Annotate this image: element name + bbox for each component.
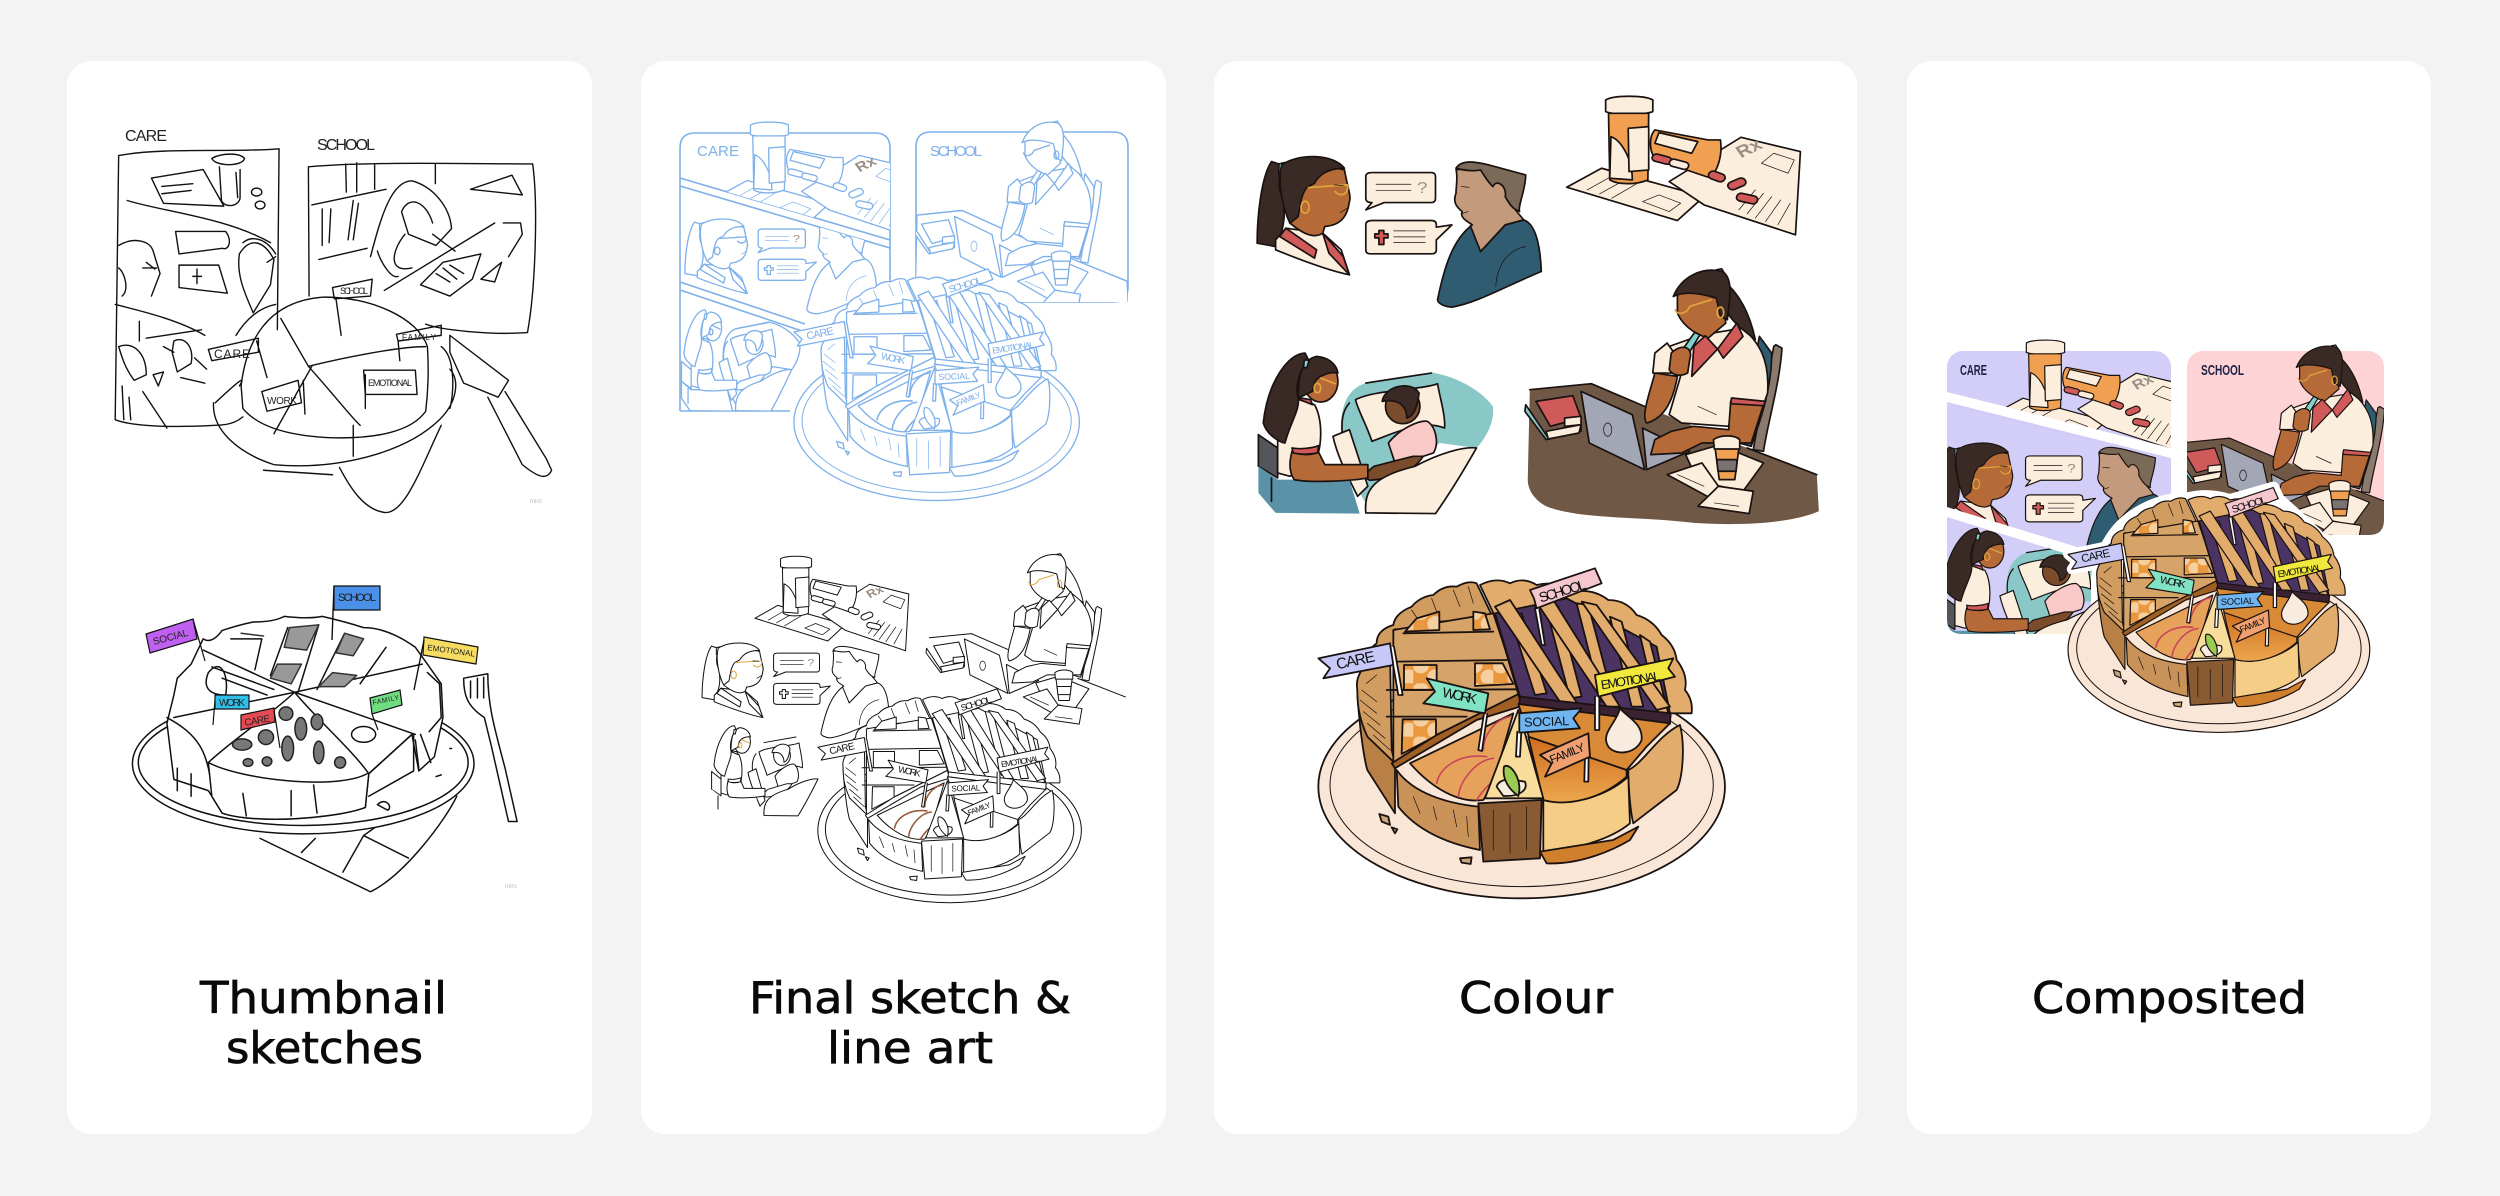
composite: conversation scene — [1947, 442, 2158, 546]
watermark: miro: miro — [505, 884, 517, 890]
line art flag labels — [828, 694, 1041, 818]
heading: colour: Colour — [1459, 973, 1614, 1024]
composite: pie with halo and flags — [2068, 488, 2370, 732]
composite: medicine scene — [2006, 340, 2171, 448]
illustration: medicine and prescription — [1567, 96, 1800, 235]
blue flag labels — [805, 275, 1035, 408]
handwritten flag labels: WORK — [267, 396, 297, 407]
flag labels on pie: FAMILY — [372, 694, 400, 707]
panel: final sketch and line art — [641, 61, 1166, 1134]
composite label: care: CARE — [1960, 362, 1987, 379]
blue label: care: CARE — [697, 143, 739, 160]
panel: colour — [1214, 61, 1857, 1134]
handwritten flag labels: EMOTIONAL — [368, 378, 412, 388]
line art flag labels: SOCIAL — [951, 783, 981, 793]
line art flag labels: WORK — [897, 764, 922, 779]
flag labels on pie: EMOTIONAL — [427, 643, 476, 659]
line art composition — [702, 554, 1127, 903]
colour flag labels: SOCIAL — [1524, 714, 1569, 730]
composite flag labels: CARE — [2080, 548, 2112, 565]
heading: final sketch and line art: line art — [827, 1023, 993, 1074]
heading: composited: Composited — [2032, 973, 2307, 1024]
composite flag labels — [2080, 495, 2323, 635]
line art flag labels: EMOTIONAL — [1000, 754, 1041, 769]
colour flag labels: CARE — [1335, 648, 1377, 673]
handwritten flag labels: SCHOOL — [340, 286, 368, 296]
blue flag labels: SCHOOL — [948, 275, 984, 296]
blue sketch composition — [680, 121, 1128, 501]
flag labels on pie: WORK — [219, 698, 245, 709]
flag labels on pie: SOCIAL — [152, 628, 190, 648]
composite flag labels: WORK — [2159, 575, 2187, 591]
composite: school panel background — [2187, 351, 2384, 535]
thumbnail: layout sketch with care and school scenes — [115, 149, 552, 513]
flag: family — [370, 690, 402, 730]
heading: thumbnail sketches — [199, 973, 447, 1074]
panel: composited — [1907, 61, 2431, 1134]
flag: work — [213, 695, 249, 725]
handwritten flag labels — [214, 286, 437, 407]
blue flag labels: WORK — [880, 351, 907, 367]
panel: thumbnail sketches — [67, 61, 592, 1134]
composite flag labels: SOCIAL — [2221, 595, 2254, 607]
heading: thumbnail sketches: sketches — [226, 1023, 423, 1074]
composite: bedside scene — [1947, 528, 2092, 634]
line art flag labels: SCHOOL — [960, 694, 992, 713]
illustration: conversation with nurse — [1257, 157, 1541, 307]
composite: desk scene — [2187, 344, 2384, 535]
composite flag labels: EMOTIONAL — [2277, 562, 2323, 579]
illustration: student at desk — [1525, 269, 1819, 524]
colour flag labels: SCHOOL — [1537, 576, 1588, 606]
handwritten flag labels: FAMILY — [402, 333, 437, 342]
line art flag labels: CARE — [828, 741, 856, 757]
blue flag labels: FAMILY — [955, 389, 983, 408]
watermark: miro: miro — [530, 499, 542, 505]
flag: social — [146, 619, 205, 661]
blue flag labels: CARE — [805, 325, 835, 343]
blue label: school: SCHOOL — [930, 143, 982, 160]
white diagonal gutters — [1947, 392, 2171, 458]
blue flag labels: EMOTIONAL — [992, 339, 1035, 356]
composite label: school: SCHOOL — [2201, 362, 2244, 379]
handwritten flag labels: CARE — [214, 347, 250, 361]
line art flag labels: FAMILY — [966, 800, 993, 818]
composite flag labels: SCHOOL — [2231, 495, 2268, 516]
thumbnail: pie with coloured flags — [132, 586, 517, 892]
flag: school — [332, 586, 380, 640]
handwritten label: care: CARE — [125, 128, 167, 145]
colour flag labels: FAMILY — [1548, 740, 1587, 767]
handwritten label: school: SCHOOL — [317, 137, 375, 154]
flag: emotional — [414, 637, 478, 690]
flag labels on pie: SCHOOL — [338, 592, 376, 604]
colour flag labels: WORK — [1441, 684, 1479, 707]
blue flag labels: SOCIAL — [938, 371, 970, 382]
heading: final sketch and line art — [749, 973, 1071, 1074]
flag labels on pie: CARE — [244, 714, 271, 729]
composite flag labels: FAMILY — [2238, 615, 2267, 635]
heading: final sketch and line art: Final sketch & — [749, 973, 1071, 1024]
flag: care — [241, 708, 280, 748]
illustration: coloured pie — [1318, 568, 1725, 898]
colour flag labels — [1335, 576, 1661, 767]
flag labels on pie — [152, 592, 476, 729]
illustration: hospital bedside — [1258, 353, 1493, 514]
heading: thumbnail sketches: Thumbnail — [199, 973, 447, 1024]
colour flag labels: EMOTIONAL — [1600, 669, 1661, 692]
composite: care panel background — [1947, 351, 2171, 634]
